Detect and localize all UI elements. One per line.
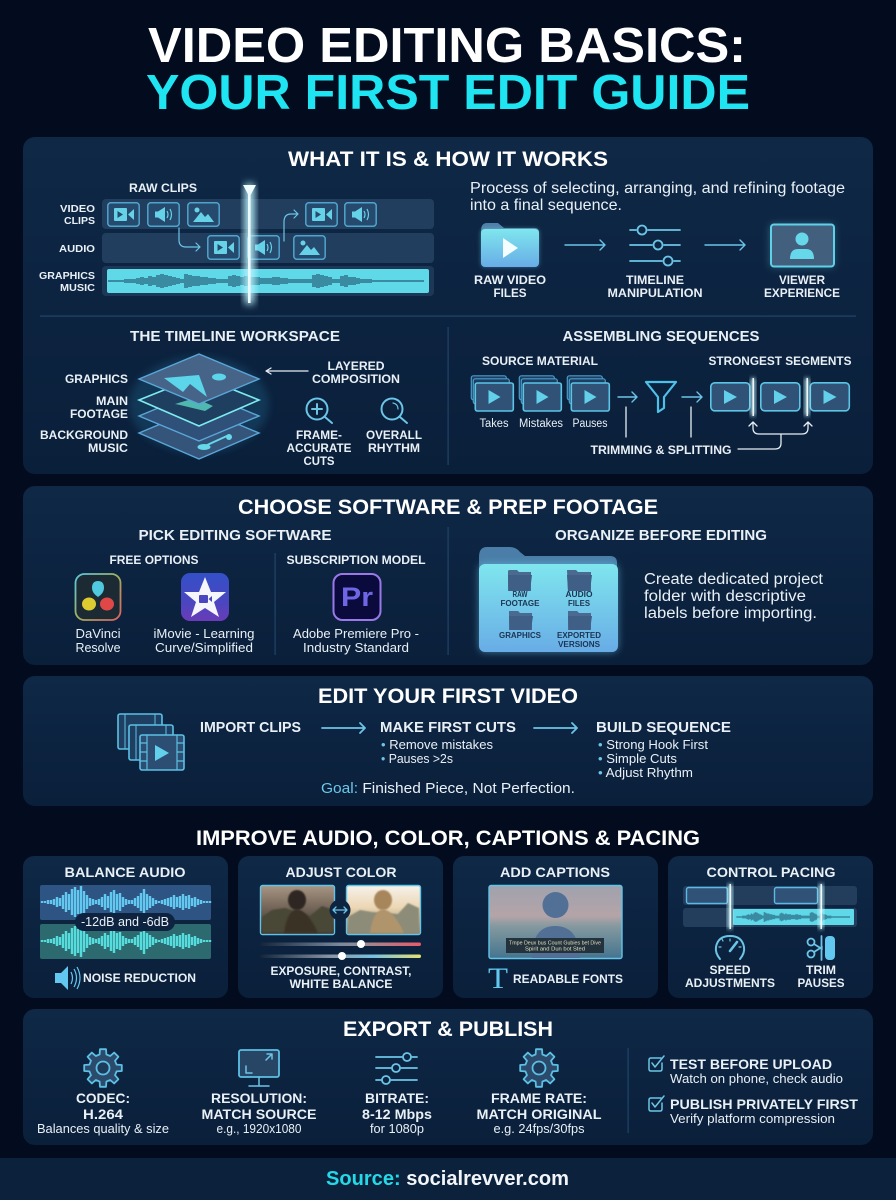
source clip stacks: Mistakes: [519, 418, 563, 430]
zoom labels: OVERALL: [366, 428, 422, 442]
labels: speed adjustments and trim pauses: SPEED: [710, 963, 751, 977]
icon: compare arrow: [330, 900, 350, 920]
definition text: Process of selecting, arranging, and refining footage: [470, 180, 845, 197]
spec: resolution: MATCH SOURCE: [202, 1107, 316, 1122]
icon: trim scissors: [808, 936, 835, 960]
card: control pacing: [668, 856, 873, 998]
icon: serif T: T: [488, 962, 508, 995]
project folder with sub-folders: FOOTAGE: [500, 599, 540, 608]
layer labels: FOOTAGE: [70, 407, 128, 421]
project folder with sub-folders: GRAPHICS: [499, 631, 542, 640]
layer labels: MUSIC: [88, 441, 128, 455]
checklist item: publish privately first: [649, 1096, 858, 1126]
spec: frame rate: e.g. 24fps/30fps: [494, 1122, 584, 1136]
checklist item: publish privately first: PUBLISH PRIVATELY FIRST: [670, 1096, 858, 1112]
icon: resolution monitor: [239, 1050, 279, 1086]
label: exposure, contrast, white balance: WHITE BALANCE: [290, 977, 392, 991]
icon: speedometer: [716, 936, 744, 959]
labels: speed adjustments and trim pauses: ADJUSTMENTS: [685, 976, 775, 990]
subheadings: [482, 354, 852, 368]
panel: what it is and how it works: [23, 137, 873, 474]
before image: [260, 886, 334, 934]
timeline diagram: MUSIC: [60, 282, 95, 294]
label: noise reduction: NOISE REDUCTION: [83, 971, 196, 985]
icon: iMovie: [181, 573, 229, 621]
caption preview image: Spirit and Dun bot Sted: [525, 946, 585, 952]
panel: edit your first video: [23, 676, 873, 806]
layer labels: GRAPHICS: [65, 372, 128, 386]
after image: [346, 886, 420, 934]
layer labels: MAIN: [96, 394, 128, 408]
software names: Adobe Premiere Pro -: [293, 626, 419, 641]
timeline diagram: VIDEO: [60, 203, 95, 215]
audio waveforms: [40, 885, 211, 959]
spec: frame rate: [476, 1091, 602, 1136]
zoom labels: ACCURATE: [286, 441, 352, 455]
icon: bitrate sliders: [376, 1053, 417, 1084]
timeline diagram: [39, 181, 434, 304]
project folder with sub-folders: FILES: [568, 599, 591, 608]
card: balance audio: [23, 856, 228, 998]
color sliders: [260, 940, 421, 960]
flow labels: EXPERIENCE: [764, 286, 840, 300]
arrow: [618, 392, 637, 402]
flow labels: RAW VIDEO: [474, 273, 546, 287]
spec: frame rate: FRAME RATE:: [491, 1091, 587, 1106]
title: [146, 19, 750, 120]
definition text: [470, 180, 845, 214]
icon: Adobe Premiere Pro: [334, 574, 380, 620]
label: readable fonts: READABLE FONTS: [513, 972, 623, 986]
definition text: into a final sequence.: [470, 197, 622, 214]
flow labels: TIMELINE: [626, 273, 684, 287]
caption preview image: Tmpe Deux bus Count Gubies bet Dive: [509, 940, 601, 946]
layer labels: [40, 372, 128, 455]
step: build sequence: BUILD SEQUENCE: [596, 719, 731, 736]
labels: speed adjustments and trim pauses: [685, 963, 844, 990]
arrow: [322, 723, 365, 733]
icon: raw video folder: [481, 223, 539, 267]
source clip stacks: Takes: [480, 418, 509, 430]
card title: CONTROL PACING: [706, 864, 836, 880]
card title: ADD CAPTIONS: [500, 864, 610, 880]
step: make first cuts: [380, 719, 516, 766]
spec: bitrate: for 1080p: [370, 1122, 424, 1136]
icon: overall rhythm magnifier: [382, 398, 407, 423]
card title: ADJUST COLOR: [286, 864, 396, 880]
software names: iMovie - Learning: [154, 626, 254, 641]
card: add captions: [453, 856, 658, 998]
heading: assembling sequences: ASSEMBLING SEQUENCES: [562, 328, 760, 345]
spec: bitrate: BITRATE:: [365, 1091, 429, 1106]
spec: bitrate: 8-12 Mbps: [362, 1107, 432, 1122]
icon: funnel: [646, 382, 676, 412]
timeline diagram: AUDIO: [59, 243, 95, 255]
label: exposure, contrast, white balance: [270, 964, 412, 991]
layer labels: BACKGROUND: [40, 428, 128, 442]
icon: speaker: [55, 966, 80, 990]
software names: Industry Standard: [303, 640, 409, 655]
arrow: [534, 723, 577, 733]
arrow: [565, 240, 605, 250]
zoom labels: CUTS: [304, 454, 334, 468]
project folder with sub-folders: [479, 547, 618, 652]
spec: bitrate: [362, 1091, 432, 1136]
timeline diagram: GRAPHICS: [39, 270, 95, 282]
subheadings: STRONGEST SEGMENTS: [708, 354, 852, 368]
arrow: [705, 240, 745, 250]
zoom labels: [286, 428, 422, 468]
source clip stacks: Pauses: [572, 418, 608, 430]
subheading: pick editing software: PICK EDITING SOFTWARE: [138, 527, 332, 544]
heading: timeline workspace: THE TIMELINE WORKSPACE: [130, 328, 340, 345]
footer source bar: Source: socialrevver.com: [326, 1168, 569, 1190]
goal statement: Goal: Finished Piece, Not Perfection.: [321, 780, 575, 797]
organize description: folder with descriptive: [644, 588, 806, 605]
flow labels: FILES: [494, 286, 526, 300]
organize description: [644, 571, 824, 622]
spec: frame rate: MATCH ORIGINAL: [476, 1107, 602, 1122]
card: adjust color: [238, 856, 443, 998]
spec: codec: Balances quality & size: [37, 1122, 169, 1136]
label: layered composition: LAYERED: [328, 359, 385, 373]
flow labels: MANIPULATION: [608, 286, 702, 300]
step: build sequence: • Strong Hook First: [598, 738, 709, 752]
labels: speed adjustments and trim pauses: TRIM: [806, 963, 836, 977]
checklist item: test before upload: Watch on phone, check audio: [670, 1072, 843, 1086]
source clip stacks: [471, 376, 609, 430]
checklist item: test before upload: TEST BEFORE UPLOAD: [670, 1056, 832, 1072]
label: layered composition: COMPOSITION: [312, 372, 400, 386]
footer source bar: [0, 1158, 896, 1200]
zoom labels: FRAME-: [296, 428, 342, 442]
label: layered composition: [312, 359, 400, 386]
software names: Resolve: [76, 640, 120, 655]
step: import clips: IMPORT CLIPS: [200, 719, 301, 736]
step: make first cuts: MAKE FIRST CUTS: [380, 719, 516, 736]
software names: DaVinci: [76, 626, 121, 641]
heading: choose software: CHOOSE SOFTWARE & PREP FOOTAGE: [238, 496, 658, 519]
step: build sequence: • Simple Cuts: [598, 752, 677, 766]
heading: improve audio, color, captions and pacing: IMPROVE AUDIO, COLOR, CAPTIONS & PACING: [196, 827, 700, 850]
step: make first cuts: • Pauses >2s: [381, 752, 453, 766]
project folder with sub-folders: VERSIONS: [558, 640, 601, 649]
timeline diagram: CLIPS: [64, 215, 95, 227]
step: make first cuts: • Remove mistakes: [381, 738, 493, 752]
layered diamonds diagram: [129, 354, 269, 459]
title: VIDEO EDITING BASICS:: [148, 19, 746, 73]
spec: resolution: [202, 1091, 316, 1136]
organize description: Create dedicated project: [644, 571, 824, 588]
heading: edit your first video: EDIT YOUR FIRST VIDEO: [318, 685, 578, 708]
project folder with sub-folders: RAW: [512, 590, 528, 599]
icon: viewer screen: [770, 224, 834, 267]
spec: codec: H.264: [83, 1107, 124, 1122]
arrow to layered composition: [266, 368, 308, 374]
icon: zoom in: [306, 398, 332, 423]
caption preview image: [489, 886, 622, 958]
software names: Curve/Simplified: [155, 640, 253, 655]
title: YOUR FIRST EDIT GUIDE: [146, 66, 750, 120]
heading: export and publish: EXPORT & PUBLISH: [343, 1018, 553, 1041]
icon: film stack: [118, 714, 184, 770]
icon: frame rate gear: [520, 1049, 558, 1087]
audio waveforms: -12dB and -6dB: [81, 915, 169, 929]
spec: codec: CODEC:: [76, 1091, 130, 1106]
icon: Adobe Premiere Pro: Pr: [341, 582, 374, 612]
subheading: subscription model: SUBSCRIPTION MODEL: [286, 553, 426, 567]
project folder with sub-folders: EXPORTED: [557, 631, 601, 640]
organize description: labels before importing.: [644, 605, 817, 622]
spec: resolution: RESOLUTION:: [211, 1091, 307, 1106]
trimming connector lines: [626, 407, 812, 449]
step: build sequence: • Adjust Rhythm: [598, 766, 693, 780]
subheading: free options: FREE OPTIONS: [110, 553, 198, 567]
strongest segments clips: [711, 378, 849, 416]
spec: codec: [37, 1091, 169, 1136]
project folder with sub-folders: AUDIO: [566, 590, 592, 599]
subheadings: SOURCE MATERIAL: [482, 354, 598, 368]
icon: codec gear: [84, 1049, 122, 1087]
panel: choose software and prep footage: [23, 486, 873, 665]
checklist item: publish privately first: Verify platform compression: [670, 1112, 835, 1126]
flow labels: VIEWER: [779, 273, 825, 287]
heading: what it is: WHAT IT IS & HOW IT WORKS: [288, 148, 608, 171]
card title: BALANCE AUDIO: [64, 864, 186, 880]
panel: export and publish: [23, 1009, 873, 1145]
flow labels: [474, 273, 840, 300]
spec: resolution: e.g., 1920x1080: [216, 1122, 302, 1136]
timeline diagram: RAW CLIPS: [129, 181, 197, 195]
zoom labels: RHYTHM: [368, 441, 420, 455]
icon: timeline sliders: [630, 226, 680, 266]
checklist item: test before upload: [649, 1056, 843, 1086]
icon: DaVinci Resolve: [76, 574, 120, 620]
label: exposure, contrast, white balance: EXPOSURE, CONTRAST,: [270, 964, 412, 978]
labels: speed adjustments and trim pauses: PAUSES: [798, 976, 844, 990]
step: build sequence: [596, 719, 731, 780]
pacing timeline: [683, 884, 857, 929]
arrow: [682, 392, 702, 402]
software names: [76, 626, 419, 655]
subheading: organize before editing: ORGANIZE BEFORE EDITING: [555, 527, 767, 544]
label: trimming and splitting: TRIMMING & SPLITTING: [590, 443, 732, 457]
